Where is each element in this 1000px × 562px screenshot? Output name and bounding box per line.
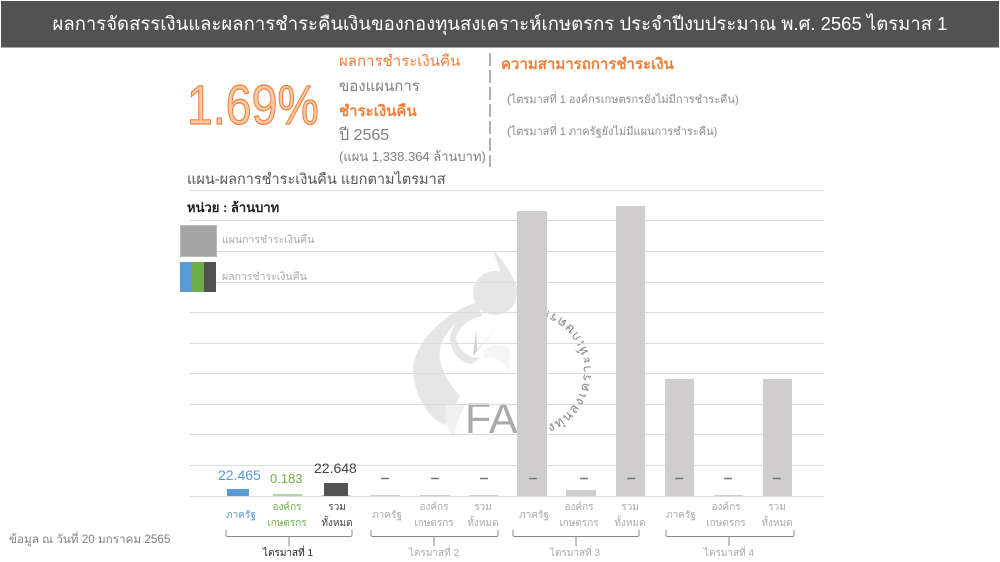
text: ไตรมาสที่ 4 — [704, 548, 754, 559]
value labels: 22.465 — [218, 467, 261, 483]
bars: quarter 2 — [370, 495, 498, 496]
text block: repayment result of plan: ของแผนการ — [339, 78, 420, 95]
quarter 4 axis labels: เกษตรกร — [706, 518, 746, 528]
quarter 1 axis labels: องค์กร — [272, 502, 302, 513]
quarter 3 axis labels: ทั้งหมด — [614, 518, 646, 528]
big percentage: 1.69% — [187, 73, 319, 136]
text block: repayment ability: (ไตรมาสที่ 1 ภาครัฐยังไม่มีแผนการชำระคืน) — [507, 126, 717, 138]
quarter 4 axis labels: ทั้งหมด — [761, 518, 793, 528]
quarter 4 axis labels — [666, 501, 793, 528]
quarter 1 axis labels: รวม — [328, 502, 346, 513]
value labels: 22.648 — [314, 460, 357, 476]
text block: repayment ability: ความสามารถการชำระเงิน — [501, 56, 674, 73]
quarter labels: ไตรมาสที่ 1 — [263, 548, 313, 559]
quarter 1 axis labels: ภาครัฐ — [226, 510, 256, 521]
watermark logo: กองทุนสงเคราะห์เกษตรกร — [547, 310, 591, 431]
text block: repayment result of plan: (แผน 1,338.364 ล้านบาท) — [339, 149, 486, 164]
text block: repayment ability — [501, 56, 739, 138]
value dashes — [381, 478, 781, 480]
text block: repayment ability: (ไตรมาสที่ 1 องค์กรเกษตรกรยังไม่มีการชำระคืน) — [507, 94, 739, 106]
unit label: หน่วย : ล้านบาท — [187, 200, 279, 215]
watermark logo: FA — [465, 395, 518, 443]
legend: plan — [180, 225, 314, 257]
quarter 1 axis labels: ทั้งหมด — [321, 518, 353, 528]
value labels — [218, 460, 357, 486]
bars: quarter 4 — [665, 379, 792, 496]
text block: repayment result of plan: ชำระเงินคืน — [339, 103, 417, 120]
text: ไตรมาสที่ 2 — [409, 548, 459, 559]
dashed divider — [489, 53, 491, 167]
quarter 2 axis labels: ทั้งหมด — [467, 518, 499, 528]
legend: plan: แผนการชำระเงินคืน — [222, 234, 314, 246]
quarter 3 axis labels: ภาครัฐ — [519, 510, 549, 521]
legend: result — [180, 262, 307, 292]
title banner — [1, 1, 999, 48]
quarter 3 axis labels: รวม — [621, 502, 639, 513]
data date note: ข้อมูล ณ วันที่ 20 มกราคม 2565 — [9, 533, 170, 546]
quarter 3 axis labels: องค์กร — [564, 502, 594, 513]
quarter 3 axis labels — [519, 501, 646, 528]
quarter 4 axis labels: องค์กร — [711, 502, 740, 513]
title banner: ผลการจัดสรรเงินและผลการชำระคืนเงินของกองทุนสงเคราะห์เกษตรกร ประจำปีงบประมาณ พ.ศ. 2565 ไตรมาส 1 — [53, 13, 947, 34]
legend: result: ผลการชำระเงินคืน — [222, 271, 307, 283]
value labels: 0.183 — [270, 471, 303, 486]
chart heading: แผน-ผลการชำระเงินคืน แยกตามไตรมาส — [187, 172, 446, 188]
quarter 2 axis labels — [372, 501, 499, 528]
quarter 2 axis labels: เกษตรกร — [414, 518, 454, 528]
bars: quarter 3 — [517, 206, 645, 496]
quarter 2 axis labels: รวม — [474, 502, 492, 513]
quarter brackets — [226, 530, 794, 546]
quarter 4 axis labels: ภาครัฐ — [666, 510, 696, 521]
quarter 2 axis labels: องค์กร — [419, 502, 448, 513]
quarter 1 axis labels: เกษตรกร — [267, 518, 307, 528]
bars: quarter 1 — [227, 483, 351, 496]
text: ไตรมาสที่ 3 — [550, 548, 600, 559]
text block: repayment result of plan: ปี 2565 — [339, 127, 389, 144]
quarter 3 axis labels: เกษตรกร — [559, 518, 599, 528]
quarter 2 axis labels: ภาครัฐ — [372, 510, 402, 521]
quarter 4 axis labels: รวม — [768, 502, 786, 513]
text block: repayment result of plan — [338, 53, 486, 164]
text block: repayment result of plan: ผลการชำระเงินคืน — [339, 53, 460, 70]
quarter 1 axis labels — [226, 501, 353, 528]
